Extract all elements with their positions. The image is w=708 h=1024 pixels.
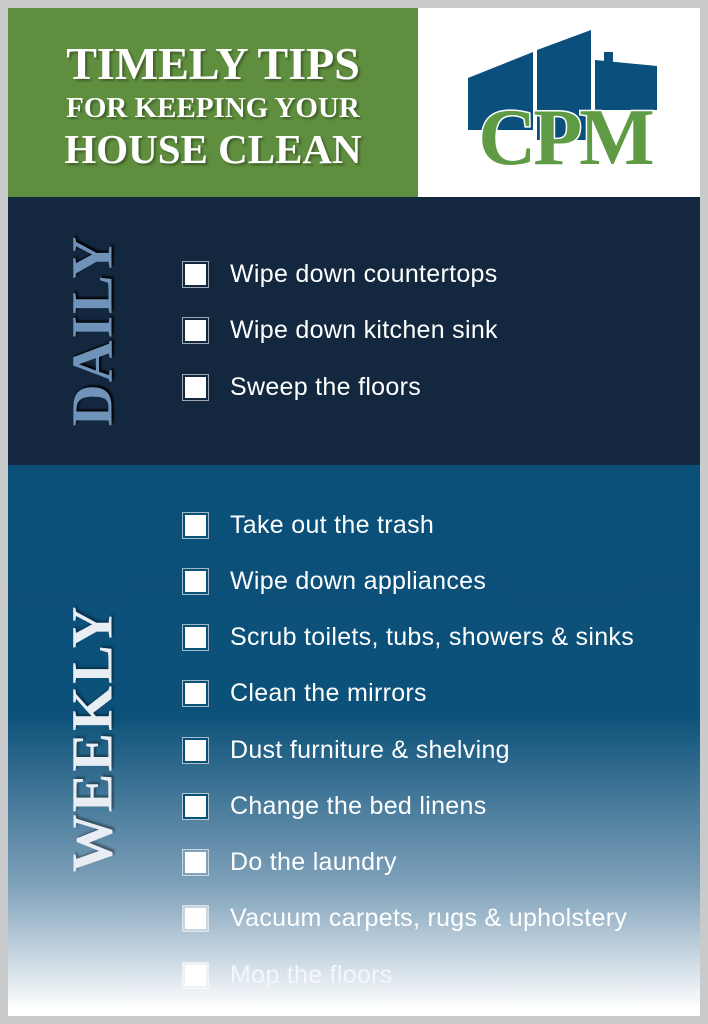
item: Vacuum carpets, rugs & upholstery [230,904,627,932]
item: Wipe down appliances [230,566,486,594]
item: Dust furniture & shelving [230,736,510,764]
label: WEEKLY: WEEKLY [60,605,124,872]
header: green title panel [8,8,418,197]
item: Take out the trash [230,510,434,538]
logo: CPM [468,30,657,175]
item: Mop the floors [230,960,393,988]
item: Clean the mirrors [230,678,427,706]
title: HOUSE CLEAN [64,126,362,172]
item: Change the bed linens [230,792,486,820]
title: TIMELY TIPS [66,38,360,89]
panel: weekly [8,465,700,1016]
item: Do the laundry [230,848,397,876]
panel: daily [8,197,700,465]
label: DAILY: DAILY [60,235,124,426]
item: Wipe down countertops [230,260,498,288]
item: Wipe down kitchen sink [230,316,498,344]
title [64,38,364,172]
title: FOR KEEPING YOUR [66,92,360,124]
item: Scrub toilets, tubs, showers & sinks [230,622,634,650]
item: Sweep the floors [230,372,421,400]
